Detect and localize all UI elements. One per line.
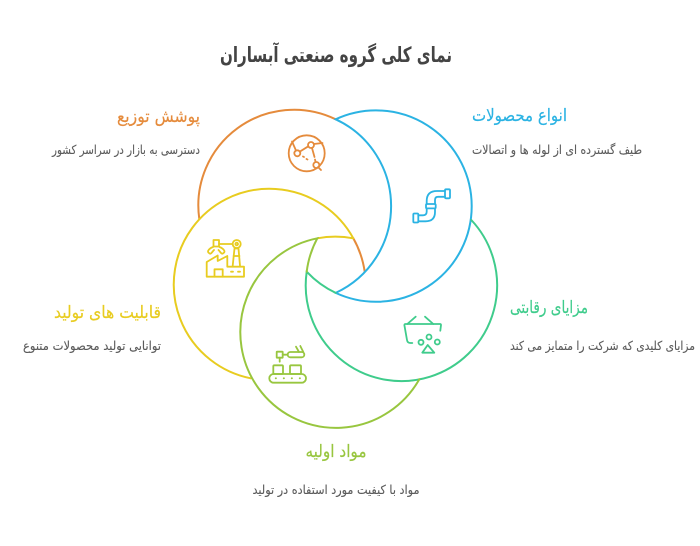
icon: factory with robot arm bbox=[207, 240, 244, 277]
shape: competitive advantage (green) bbox=[306, 220, 497, 381]
label: production capability: قابلیت های تولید bbox=[54, 303, 161, 323]
label: distribution coverage: پوشش توزیع bbox=[117, 107, 200, 127]
shape: product range (blue) bbox=[336, 110, 472, 302]
icon: network globe bbox=[289, 135, 325, 171]
label: production capability: توانایی تولید محصولات متنوع bbox=[23, 338, 161, 354]
label: distribution coverage bbox=[51, 107, 200, 158]
label: production capability bbox=[23, 303, 161, 354]
label: product range: طیف گسترده ای از لوله ها و اتصالات bbox=[472, 142, 642, 158]
icon: pipe bbox=[413, 189, 450, 222]
label: distribution coverage: دسترسی به بازار در سراسر کشور bbox=[51, 142, 200, 158]
shape: raw materials (lime) bbox=[240, 238, 419, 428]
label: product range: انواع محصولات bbox=[472, 106, 567, 126]
icon: basket bbox=[404, 317, 441, 353]
label: raw materials: مواد اولیه bbox=[306, 442, 366, 462]
shape: distribution coverage (orange) bbox=[198, 110, 365, 272]
title: نمای کلی گروه صنعتی آبساران bbox=[220, 42, 452, 67]
label: raw materials bbox=[252, 442, 420, 498]
label: product range bbox=[472, 106, 642, 158]
shape: production capability (yellow) bbox=[174, 189, 353, 378]
label: competitive advantage: مزایای رقابتی bbox=[510, 298, 588, 318]
label: competitive advantage bbox=[510, 298, 695, 354]
icon: conveyor with robot bbox=[269, 346, 306, 383]
label: raw materials: مواد با کیفیت مورد استفاده در تولید bbox=[252, 482, 420, 498]
